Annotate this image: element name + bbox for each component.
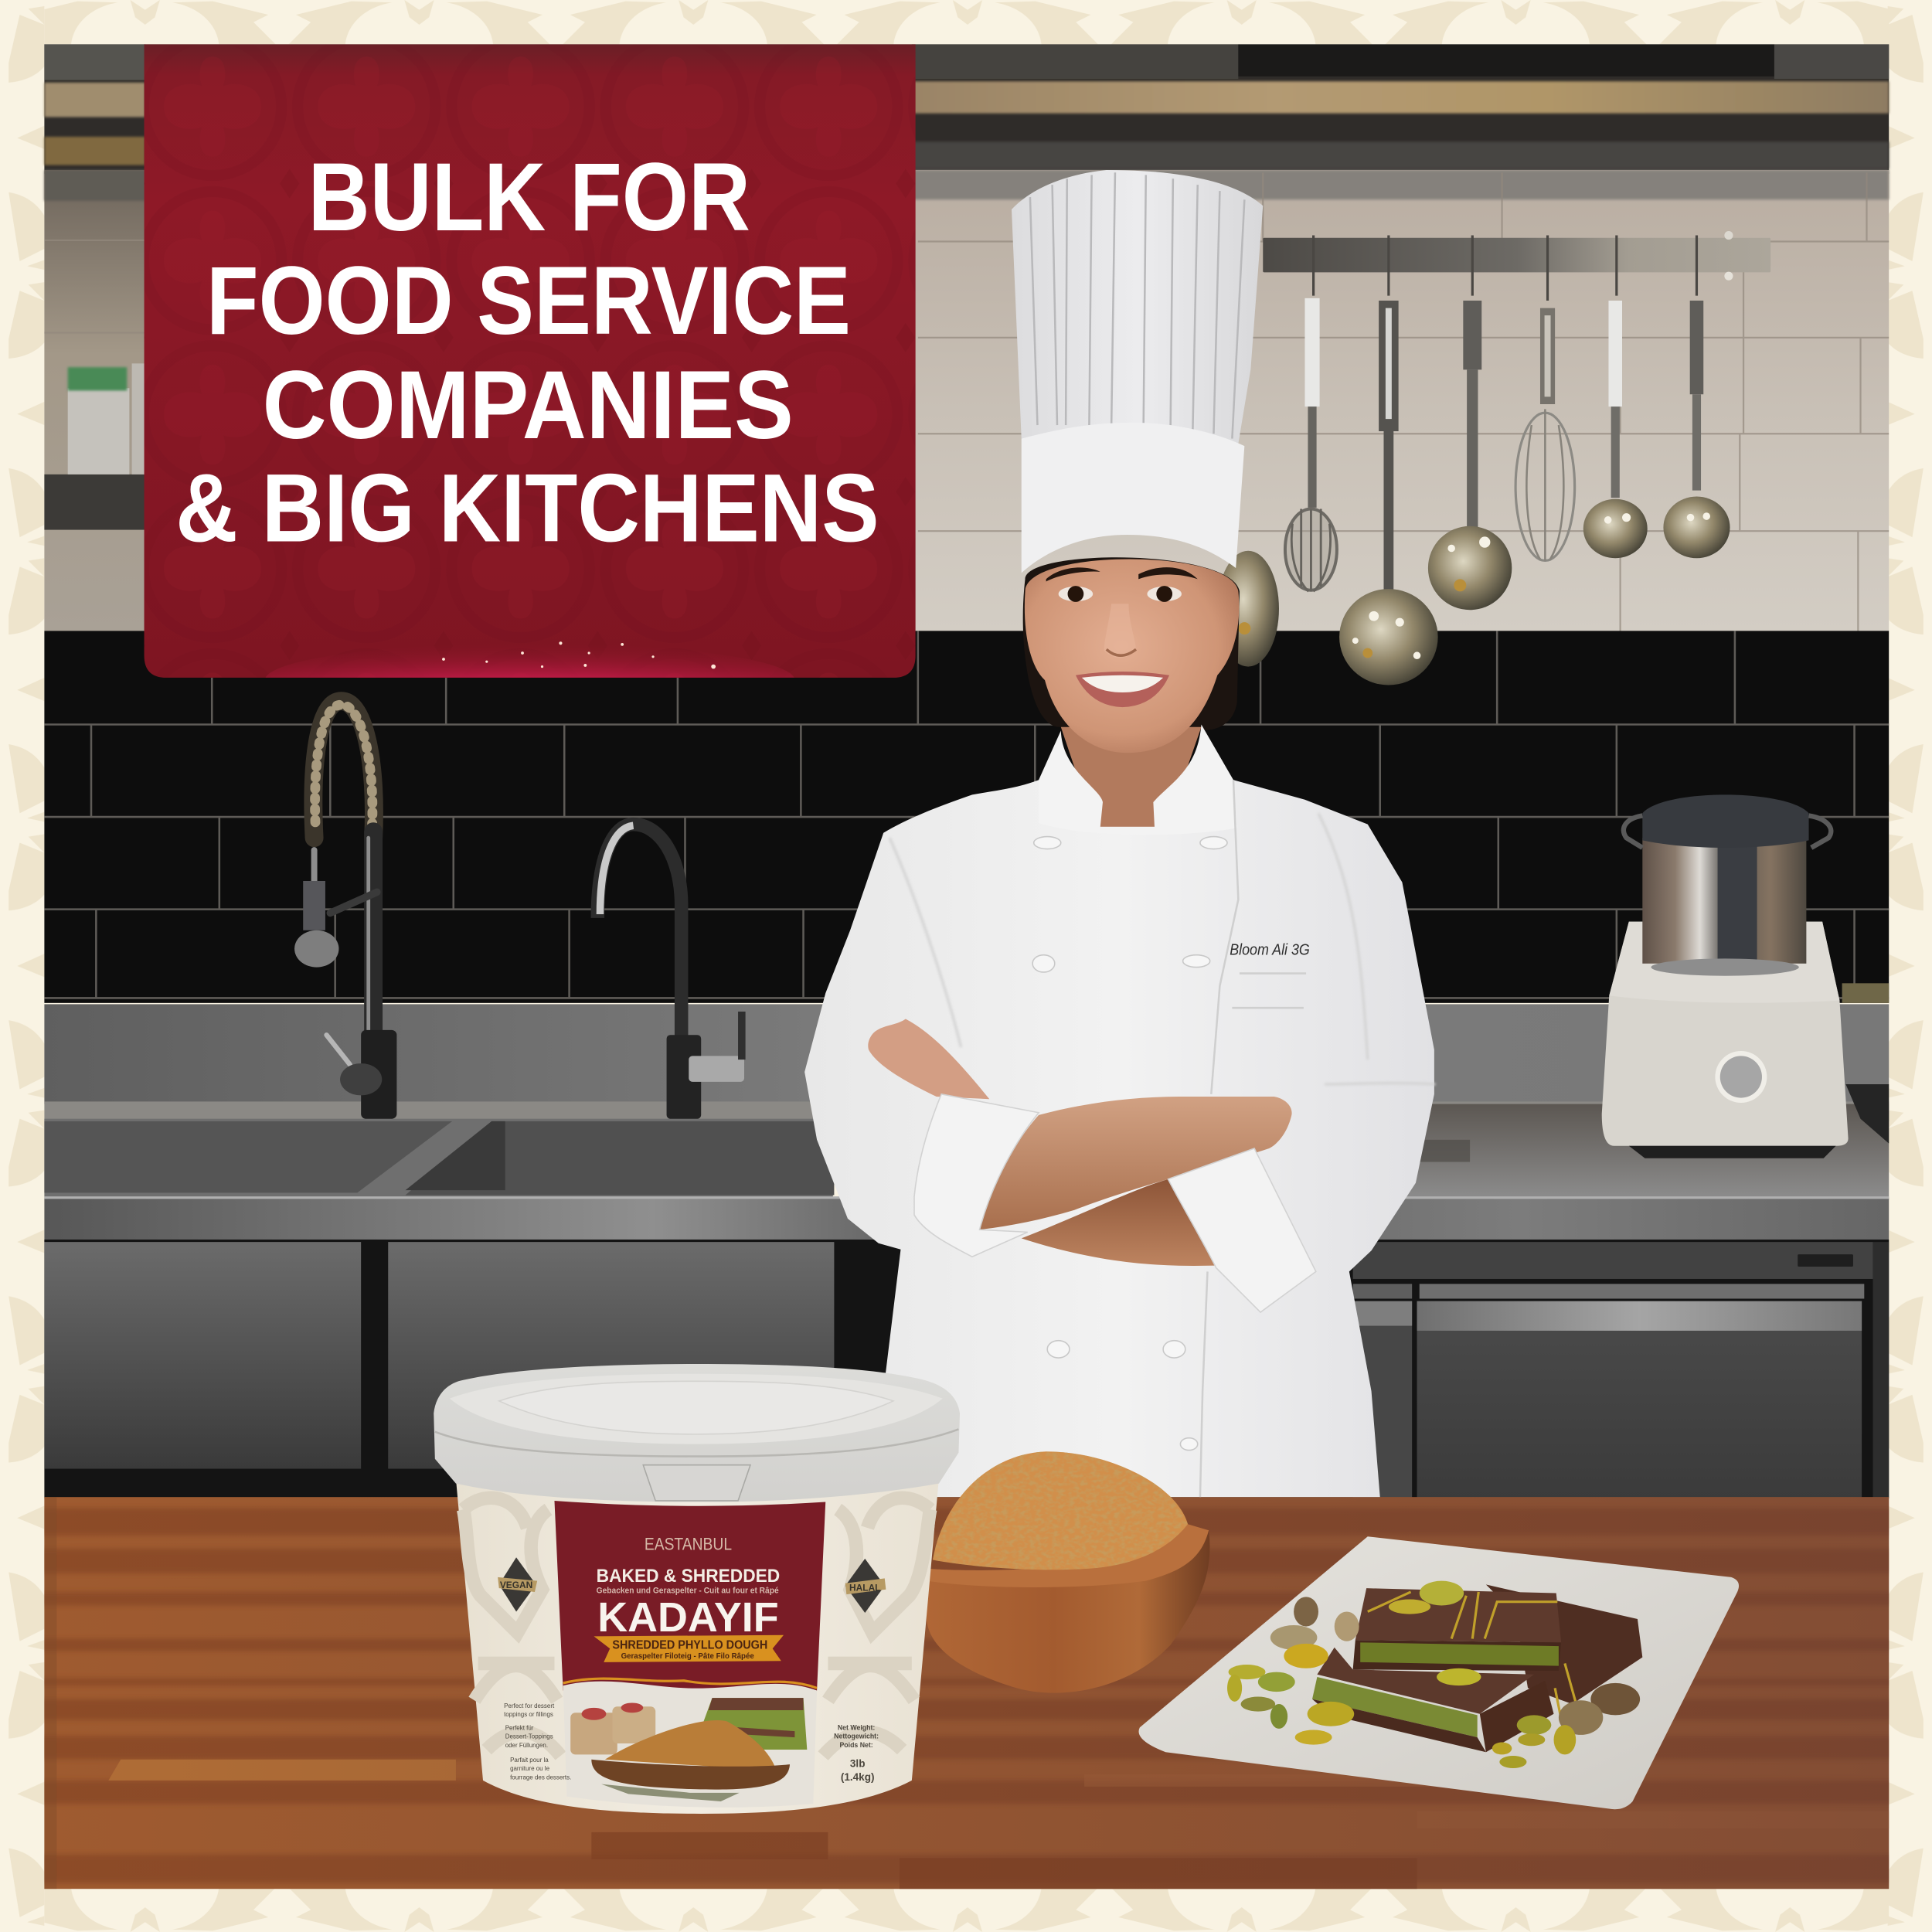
- left small print: Perfekt für: [505, 1725, 534, 1732]
- chef coat: [804, 725, 1435, 1497]
- back chocolate bar: [1486, 1584, 1642, 1704]
- vegan badge: [498, 1557, 537, 1611]
- chef: [804, 170, 1435, 1497]
- chef face: [1025, 559, 1239, 753]
- stainless backsplash and counter with sinks: [44, 983, 1889, 1242]
- left small print: Dessert-Toppings: [505, 1733, 553, 1740]
- orange ribbon: Geraspelter Filoteig - Pâte Filo Râpée: [621, 1652, 754, 1661]
- banner headline text: COMPANIES: [263, 351, 794, 459]
- left small print: garniture ou le: [510, 1765, 550, 1772]
- cabinets under the counter: [44, 1240, 1889, 1498]
- wooden bowl of shredded kadayif: [927, 1451, 1209, 1693]
- halal badge: HALAL: [849, 1582, 880, 1593]
- net weight: Net Weight:: [838, 1724, 875, 1732]
- banner headline text: BULK FOR: [308, 143, 750, 251]
- left small print: oder Füllungen.: [505, 1742, 548, 1749]
- tub side pattern: [463, 1498, 930, 1756]
- translated subtitle: Gebacken und Geraspelter - Cuit au four et Râpé: [597, 1587, 779, 1596]
- tub lid: [434, 1364, 960, 1502]
- bowl body: [927, 1530, 1209, 1693]
- net weight: [834, 1724, 879, 1783]
- shredded kadayif mound: [933, 1451, 1188, 1570]
- kadayif tub product: [434, 1364, 960, 1814]
- kadayif name: KADAYIF: [597, 1594, 779, 1641]
- gooseneck faucet: [597, 825, 744, 1119]
- stand mixer: [1602, 794, 1849, 1158]
- banner headline text: & BIG KITCHENS: [175, 454, 879, 563]
- white plate with chocolate pistachio bars: [1139, 1536, 1739, 1809]
- product photo on label: [563, 1679, 817, 1808]
- black subway tiles: [44, 631, 1889, 1003]
- bowl rim: [927, 1524, 1209, 1587]
- shelf containers: [68, 363, 151, 474]
- tub body: [456, 1478, 939, 1814]
- utensil rack with hanging tools: [1217, 231, 1770, 685]
- top chocolate bar: [1353, 1588, 1582, 1725]
- lower chocolate bar: [1312, 1648, 1554, 1752]
- left small print: Perfect for dessert: [504, 1702, 555, 1709]
- wooden countertop: [44, 1497, 1889, 1889]
- left small print: Parfait pour la: [510, 1757, 549, 1764]
- left small print: fourrage des desserts.: [510, 1774, 571, 1781]
- orange ribbon: SHREDDED PHYLLO DOUGH: [612, 1638, 767, 1651]
- chef neck: [1061, 727, 1202, 833]
- banner glow: [266, 641, 794, 678]
- banner lattice pattern: [208, 57, 833, 59]
- net weight: (1.4kg): [841, 1771, 875, 1783]
- chef hair: [1023, 557, 1240, 730]
- orange ribbon: [594, 1635, 784, 1662]
- banner headline text: FOOD SERVICE: [206, 247, 851, 355]
- baked and shredded line: BAKED & SHREDDED: [597, 1566, 780, 1587]
- chef toque hat: [1012, 170, 1263, 573]
- vegan badge: VEGAN: [500, 1580, 532, 1590]
- halal badge: [845, 1559, 886, 1613]
- plate: [1139, 1536, 1739, 1809]
- embroidered coat name: Bloom Ali 3G: [1230, 941, 1310, 959]
- tall spring faucet: [294, 701, 396, 1119]
- scattered pistachios: [1227, 1581, 1640, 1768]
- brand name: EASTANBUL: [645, 1535, 732, 1554]
- red headline banner: [145, 44, 916, 717]
- net weight: Poids Net:: [839, 1741, 873, 1749]
- left small print: toppings or fillings: [504, 1711, 553, 1718]
- red label: [554, 1501, 825, 1691]
- upper wall and tiles: [44, 44, 1889, 631]
- net weight: Nettogewicht:: [834, 1733, 879, 1740]
- net weight: 3lb: [850, 1757, 865, 1769]
- crossed arms: [868, 1019, 1316, 1312]
